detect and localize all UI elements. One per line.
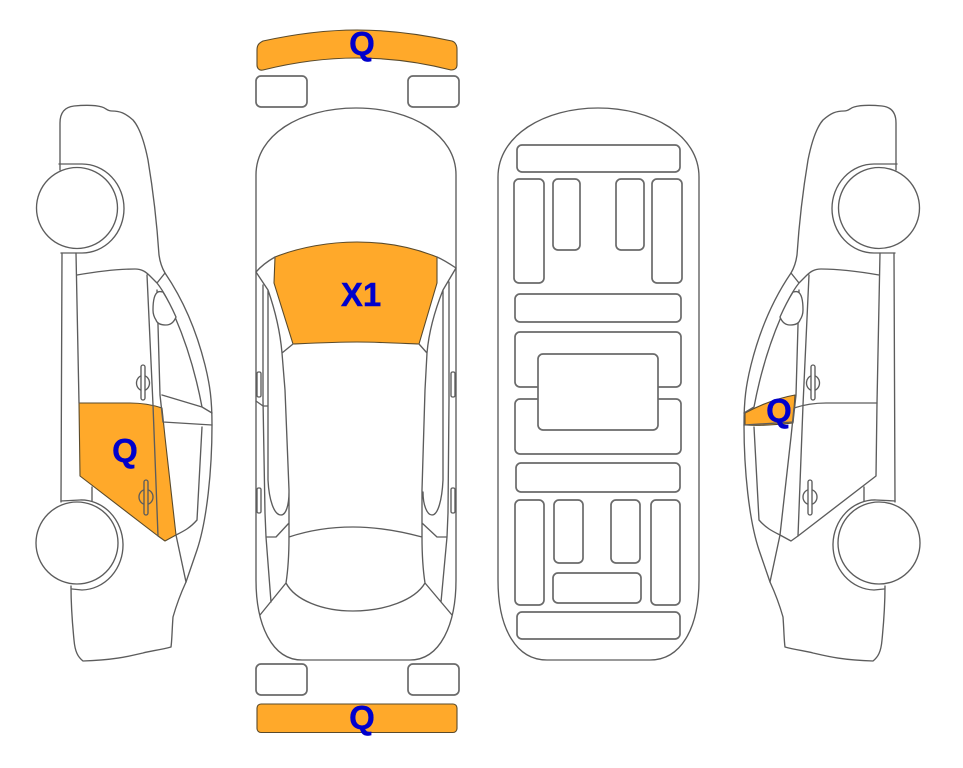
underside outline (498, 108, 699, 660)
label Q front bumper: Q (349, 25, 375, 62)
top view body outline (256, 108, 456, 660)
right view mirrored car lines (744, 105, 920, 661)
front right headlight (408, 76, 459, 107)
left view wheel arches (59, 164, 124, 590)
right view orange damaged window strip (745, 395, 795, 425)
right view body outline (744, 105, 896, 661)
right view lower door handle (803, 480, 817, 515)
left view orange damaged door (79, 403, 176, 541)
left view lower door handle (139, 480, 153, 515)
label Q right window: Q (766, 392, 792, 429)
left view mirror (153, 292, 176, 325)
right view front wheel (838, 168, 920, 248)
rear left light (256, 664, 307, 695)
windshield orange (274, 242, 437, 344)
top view of car (256, 25, 459, 736)
right view door outline (780, 403, 877, 541)
right view upper door handle (806, 365, 820, 400)
label X1 windshield: X1 (341, 276, 381, 313)
side mirror and handle marks (257, 372, 455, 513)
left view body outline (60, 105, 212, 661)
underside view of car (498, 108, 699, 660)
right view wheel arches (832, 164, 897, 590)
rear bumper orange (257, 704, 457, 732)
rear right light (408, 664, 459, 695)
front bumper orange (257, 30, 457, 70)
underside panels (514, 145, 682, 639)
right view door and window lines (744, 253, 895, 582)
left view rear wheel (36, 502, 118, 584)
left view door and window lines (61, 253, 212, 582)
right side view of car (744, 105, 920, 661)
right view mirror (780, 292, 803, 325)
top view structural lines (256, 257, 456, 615)
left view upper door handle (136, 365, 150, 400)
left side view of car (36, 105, 212, 661)
label Q left door: Q (112, 432, 138, 469)
front left headlight (256, 76, 307, 107)
left view front wheel (36, 168, 118, 248)
label Q rear bumper: Q (349, 699, 375, 736)
right view rear wheel (838, 502, 920, 584)
